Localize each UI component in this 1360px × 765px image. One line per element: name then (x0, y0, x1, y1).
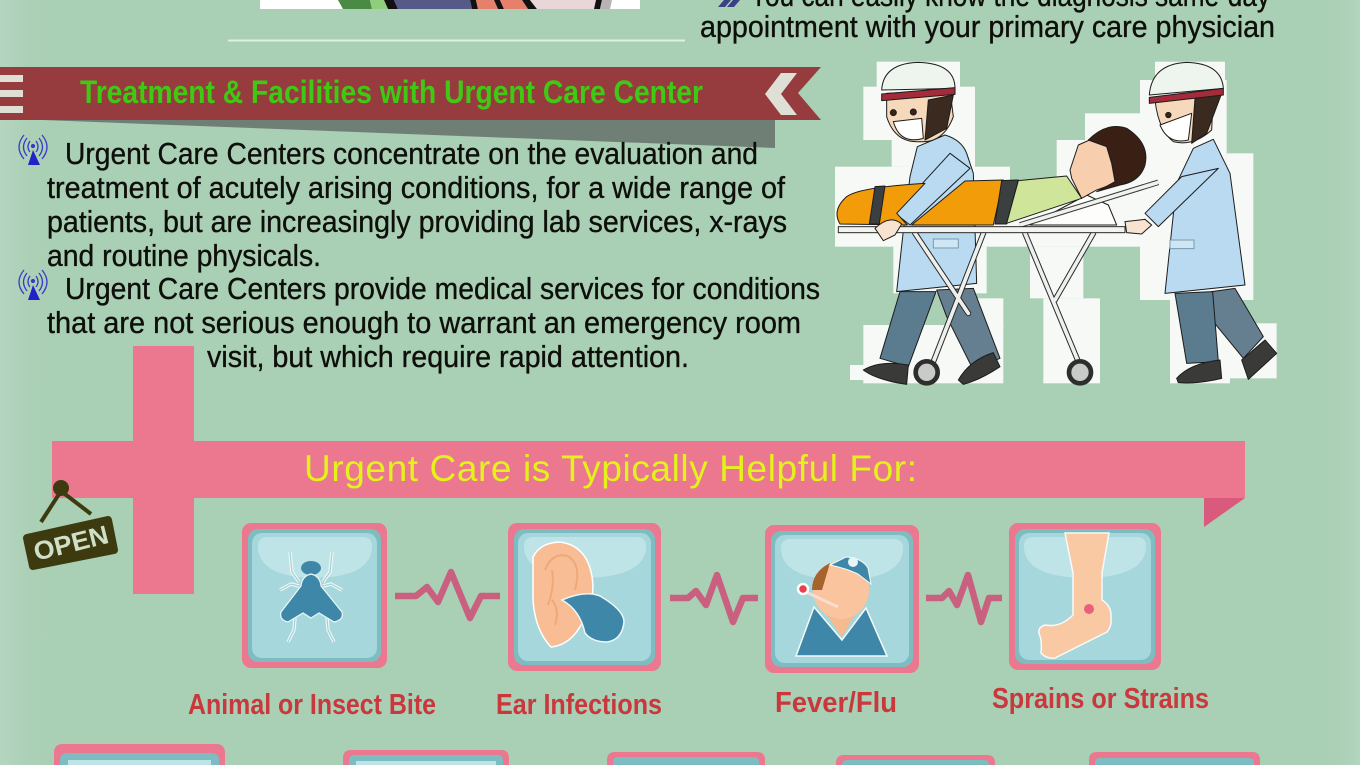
icon: open sign: OPEN (30, 519, 112, 567)
icon: foot with sore ankle (1039, 533, 1111, 658)
text block: urgent care description: patients, but are increasingly providing lab services, x-rays (47, 204, 787, 239)
connector: pulse line 3 (926, 575, 1002, 622)
labels: conditions row one: Ear Infections (496, 689, 662, 721)
icon: antenna bullet 1 (19, 135, 47, 165)
labels: conditions row one: Sprains or Strains (992, 683, 1209, 715)
paramedic 2 (1145, 62, 1277, 383)
icon: antenna bullet 2 (19, 270, 47, 300)
icon: patient with thermometer (796, 557, 887, 656)
icon: ear with drop (533, 542, 624, 647)
card: sprains or strains (1009, 523, 1161, 670)
cards: cropped second row (54, 744, 1260, 765)
text block: urgent care description: Urgent Care Centers concentrate on the evaluation and (65, 136, 758, 171)
text block: urgent care description: that are not serious enough to warrant an emergency room (47, 305, 801, 340)
icon: fly (280, 552, 342, 642)
text block: urgent care description: visit, but which require rapid attention. (207, 339, 689, 374)
connector: pulse line 2 (670, 575, 758, 622)
patient on stretcher (837, 127, 1158, 225)
labels: conditions row one (188, 683, 1209, 721)
card: fever or flu (765, 525, 919, 673)
heading ribbon: urgent care is typically helpful for (52, 346, 1245, 594)
labels: conditions row one: Animal or Insect Bite (188, 689, 436, 721)
connector: pulse line 1 (395, 572, 500, 618)
heading ribbon: urgent care is typically helpful for: Urgent Care is Typically Helpful For: (304, 448, 917, 489)
card: animal or insect bite (242, 523, 387, 668)
card: ear infections (508, 523, 661, 671)
labels: conditions row one: Fever/Flu (775, 687, 897, 719)
text block: top right note: appointment with your primary care physician (700, 9, 1275, 44)
text block: urgent care description: treatment of acutely arising conditions, for a wide range of (47, 170, 785, 205)
banner: treatment and facilities: Treatment & Facilities with Urgent Care Center (80, 74, 703, 110)
paramedic 1 (863, 62, 1000, 384)
text block: urgent care description: and routine physicals. (47, 238, 321, 273)
text block: urgent care description (19, 135, 820, 374)
banner: treatment and facilities (0, 67, 821, 148)
icon: double slash bullet (718, 0, 740, 7)
stretcher frame (838, 227, 1125, 383)
cropped illustration strip at top (260, 0, 640, 9)
illustration: paramedics with stretcher (835, 62, 1277, 384)
icon: open sign (27, 480, 114, 567)
text block: urgent care description: Urgent Care Centers provide medical services for conditions (65, 271, 820, 306)
